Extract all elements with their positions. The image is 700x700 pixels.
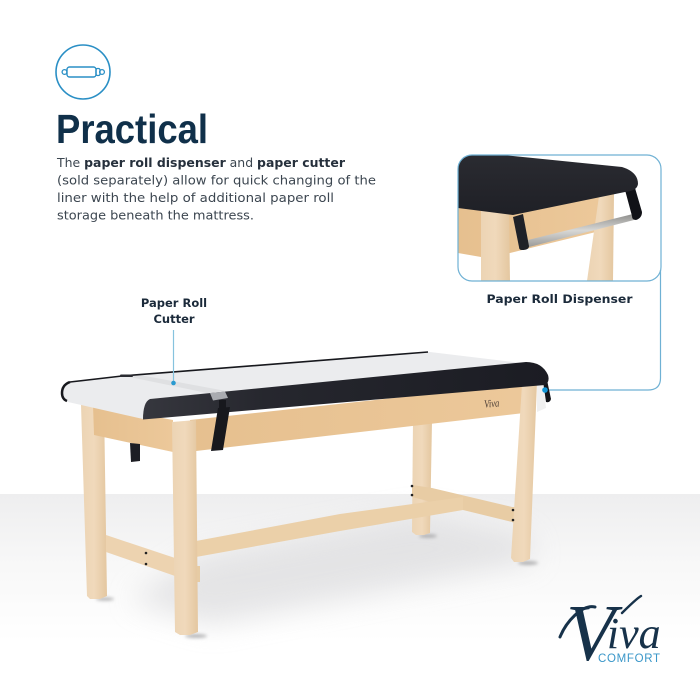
back right leg: [412, 420, 432, 535]
back left leg: [81, 405, 107, 599]
description text: [56, 156, 376, 222]
floor shadow under table: [96, 515, 538, 638]
mattress back edge: [70, 352, 428, 382]
icon: paper roll: [56, 45, 110, 99]
connector line from inset to dispenser: [545, 270, 660, 390]
description text: storage beneath the mattress.: [57, 208, 254, 222]
front apron: [190, 384, 524, 451]
white paper on mattress: [62, 352, 522, 419]
stretcher screws: [145, 485, 514, 565]
inset: paper roll dispenser detail: [452, 155, 661, 281]
description text: liner with the help of additional paper roll: [57, 191, 334, 205]
floor background: [0, 494, 700, 700]
front right leg: [511, 382, 537, 562]
logo: Viva Comfort: V: [566, 590, 615, 678]
left hanging strap: [130, 443, 140, 462]
label: paper roll cutter: Cutter: [153, 312, 195, 326]
leg bracket: [197, 566, 200, 582]
small apron logo: Viva: [484, 397, 500, 411]
cutter band across paper: [120, 375, 226, 393]
massage table: [62, 352, 551, 635]
front left leg: [172, 420, 198, 635]
logo: Viva Comfort: COMFORT: [598, 653, 660, 665]
dispenser bracket: [543, 380, 551, 402]
right side stretcher: [412, 485, 518, 525]
dispenser marker dot: [542, 387, 548, 393]
label: paper roll dispenser: Paper Roll Dispenser: [486, 292, 633, 306]
cutter gray band: [210, 392, 228, 400]
black mattress front: [143, 362, 549, 420]
label: paper roll cutter: Paper Roll: [141, 296, 207, 310]
title: Practical: [56, 106, 208, 152]
leader: paper cutter: [171, 330, 176, 385]
label: paper roll cutter: [141, 296, 207, 326]
left side stretcher: [106, 535, 175, 576]
logo: Viva Comfort: [560, 590, 661, 678]
left apron: [93, 405, 173, 452]
logo: Viva Comfort: iva: [607, 609, 661, 658]
central stretcher: [196, 497, 463, 557]
paper roll: [537, 383, 546, 412]
description text: (sold separately) allow for quick changing of the: [57, 174, 376, 188]
cutter black strap: [211, 407, 230, 451]
description text: The paper roll dispenser and paper cutter: [56, 156, 346, 170]
